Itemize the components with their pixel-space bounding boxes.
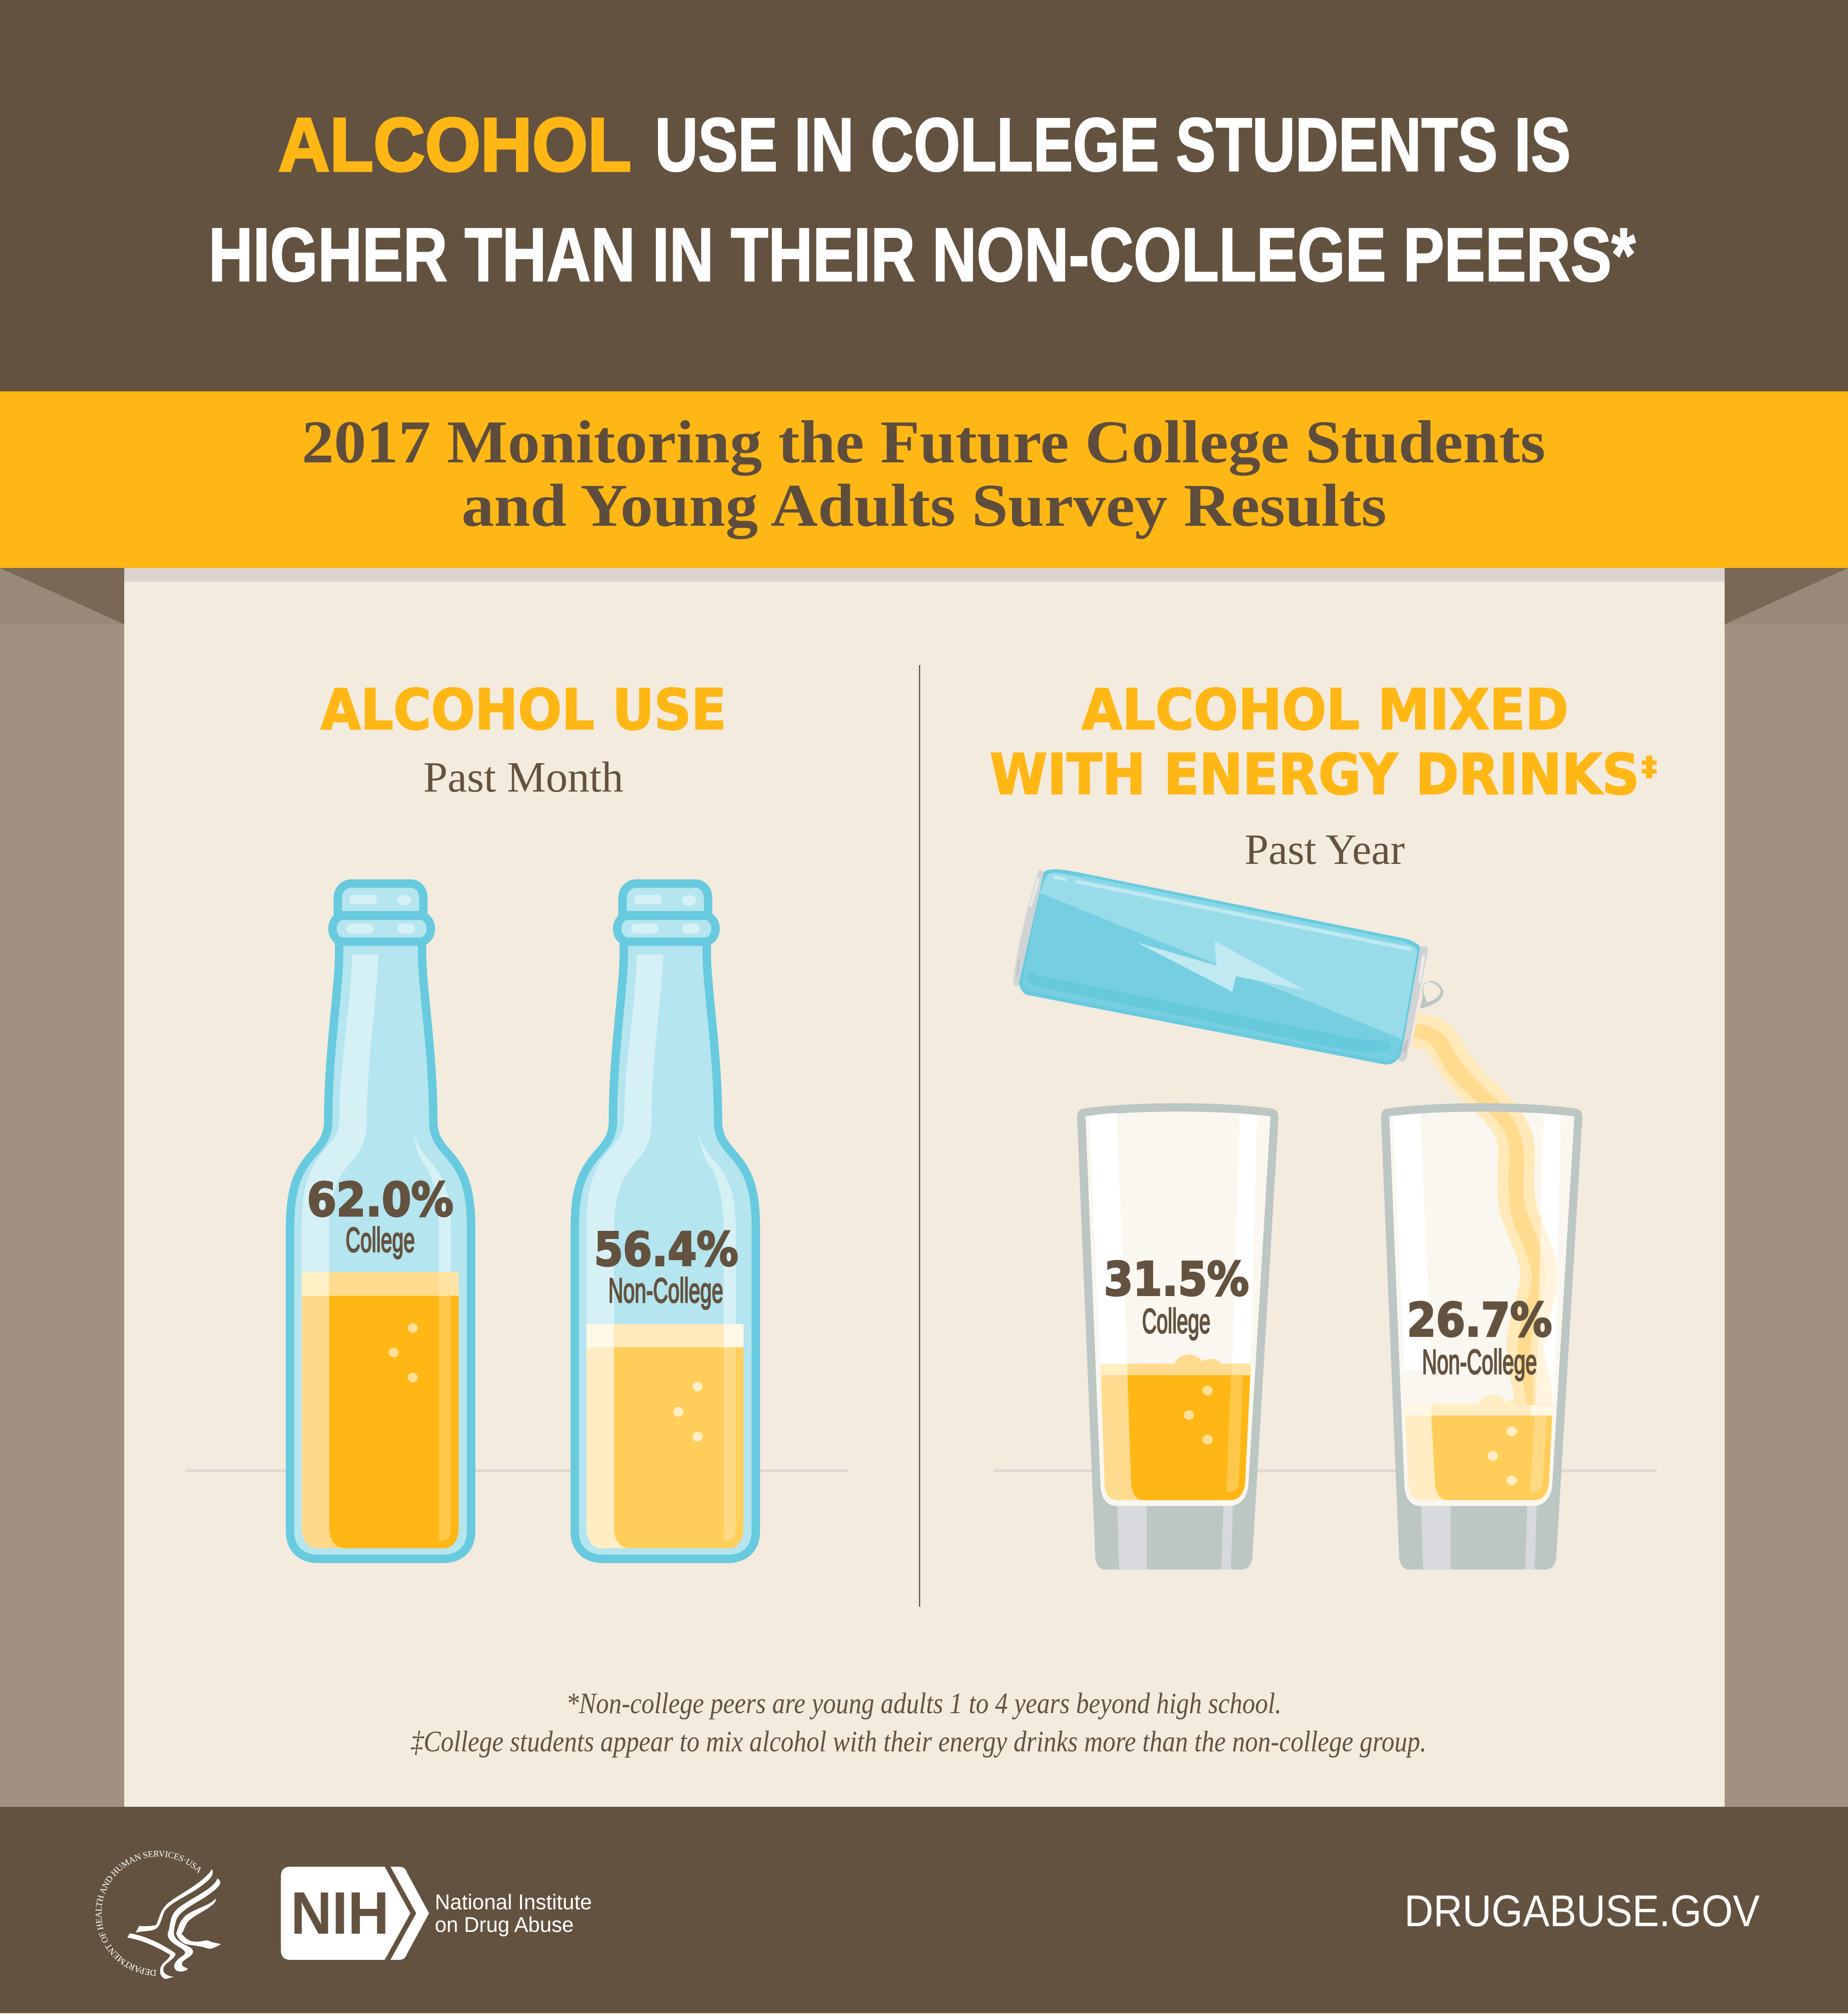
sidebar left	[0, 568, 124, 1810]
stat: 62.0% college: College	[346, 1220, 415, 1259]
footnotes	[411, 1687, 1426, 1758]
stat: 26.7% non-college	[1407, 1293, 1552, 1381]
bottle: college	[290, 883, 471, 1559]
heading: alcohol mixed with energy drinks: ALCOHOL MIXED	[1082, 677, 1568, 742]
glass: non-college	[1381, 1103, 1582, 1569]
glass: college	[1077, 1103, 1278, 1569]
shelf line left	[185, 1469, 848, 1472]
glass rim and highlight over stream	[1381, 1103, 1582, 1404]
stat: 62.0% college	[307, 1173, 453, 1259]
yellow banner	[0, 391, 1848, 568]
sidebar right	[1725, 568, 1848, 1810]
subheading: past month: Past Month	[423, 753, 623, 801]
bottle: non-college	[575, 883, 756, 1559]
stat: 56.4% non-college	[594, 1222, 738, 1310]
stat: 56.4% non-college: Non-College	[608, 1271, 723, 1310]
heading: alcohol mixed with energy drinks: ‡	[1642, 751, 1657, 781]
banner text: and Young Adults Survey Results	[461, 472, 1387, 539]
title: ALCOHOL	[278, 102, 631, 187]
NIDA wordmark	[435, 1891, 592, 1937]
main panel	[124, 568, 1725, 1807]
title	[209, 102, 1635, 297]
stat: 26.7% non-college: Non-College	[1422, 1342, 1537, 1381]
NIH logo	[281, 1867, 429, 1960]
bottom edge line	[0, 2013, 1848, 2014]
energy drink can	[1013, 869, 1443, 1064]
stat: 31.5% college: College	[1142, 1301, 1210, 1340]
NIDA wordmark: on Drug Abuse	[435, 1913, 574, 1937]
stat: 26.7% non-college: 26.7%	[1407, 1293, 1552, 1347]
panel shadow strip	[124, 568, 1725, 582]
website: DRUGABUSE.GOV	[1404, 1886, 1760, 1936]
stat: 31.5% college: 31.5%	[1104, 1252, 1249, 1306]
NIDA wordmark: National Institute	[435, 1891, 592, 1914]
footnotes: ‡College students appear to mix alcohol with their energy drinks more than the non-college group.	[411, 1725, 1426, 1758]
HHS seal: DEPARTMENT OF HEALTH AND HUMAN SERVICES·USA	[94, 1849, 204, 1978]
heading: alcohol mixed with energy drinks	[990, 677, 1657, 807]
subheading: past year: Past Year	[1245, 826, 1405, 873]
header band	[0, 0, 1848, 392]
stat: 31.5% college	[1104, 1252, 1249, 1340]
heading: alcohol mixed with energy drinks: WITH ENERGY DRINKS	[990, 742, 1639, 807]
heading: alcohol use: ALCOHOL USE	[321, 677, 726, 742]
divider	[919, 665, 920, 1607]
banner text: 2017 Monitoring the Future College Students	[302, 408, 1545, 476]
footnotes: *Non-college peers are young adults 1 to 4 years beyond high school.	[566, 1687, 1281, 1720]
footer band	[0, 1807, 1848, 2013]
banner text	[302, 408, 1545, 539]
stat: 56.4% non-college: 56.4%	[594, 1222, 738, 1277]
shelf line right	[994, 1469, 1656, 1472]
pour stream	[1412, 1013, 1557, 1405]
NIH logo: NIH	[291, 1880, 389, 1947]
title: USE IN COLLEGE STUDENTS IS	[655, 102, 1571, 187]
stat: 62.0% college: 62.0%	[307, 1173, 453, 1227]
